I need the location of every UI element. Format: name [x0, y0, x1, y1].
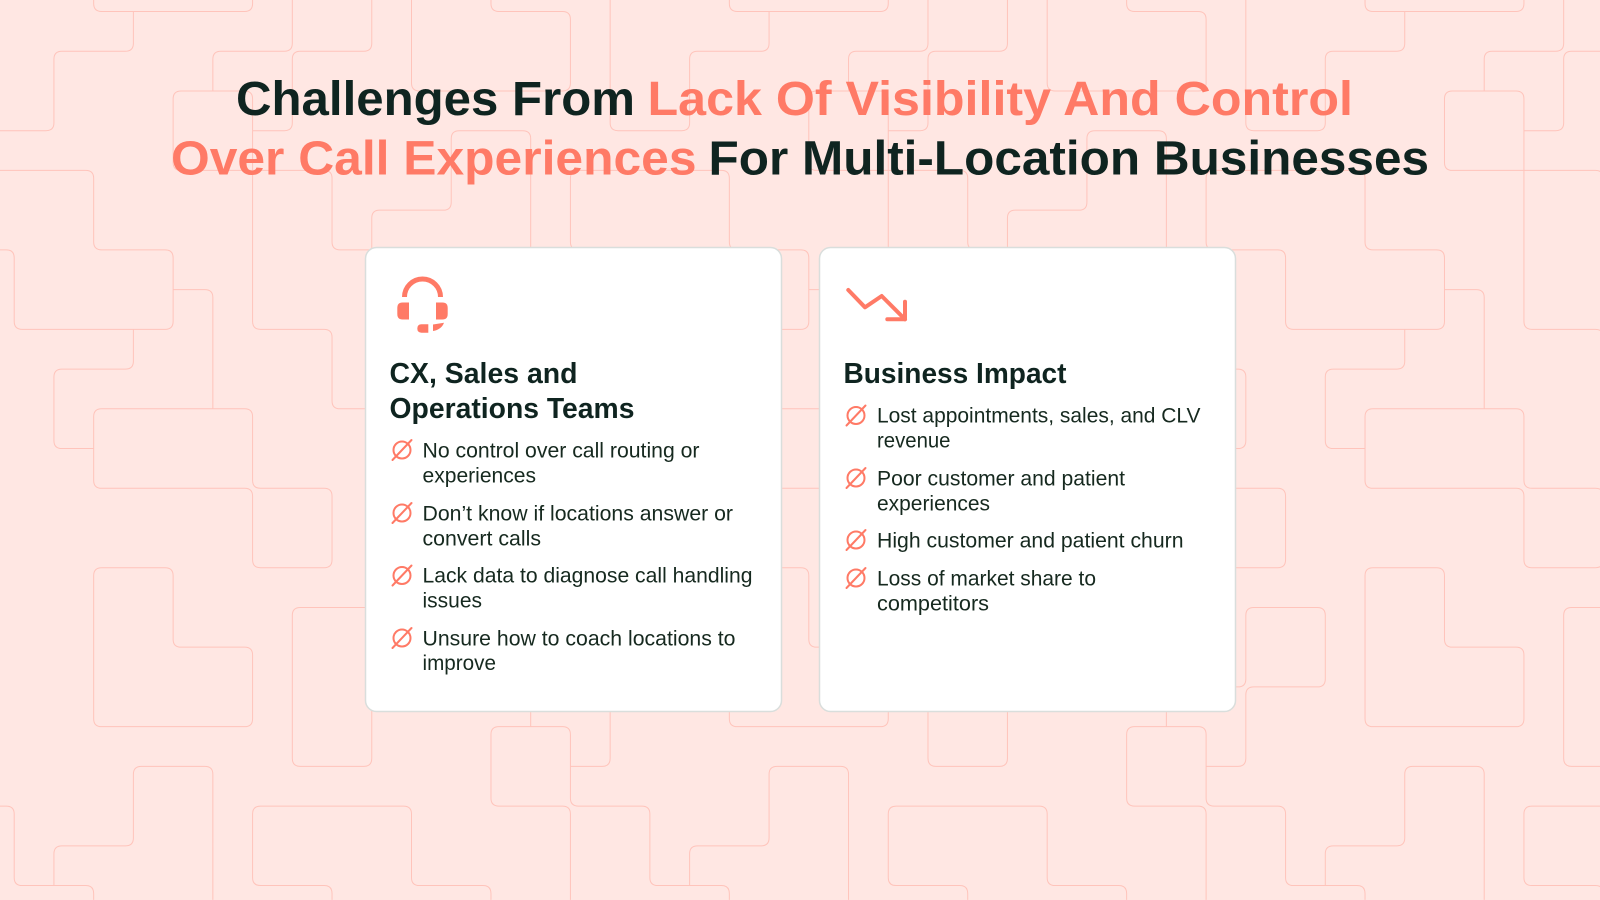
heading: Business Impact: Business Impact [844, 358, 1067, 390]
list item: no control [392, 440, 700, 488]
title: Lack Of Visibility And Control [648, 73, 1353, 126]
list item: lost appointments [846, 404, 1200, 452]
panel: Business Impact [820, 248, 1236, 712]
list item: lack data: Lack data to diagnose call handling [422, 564, 752, 588]
list item: churn: High customer and patient churn [877, 530, 1184, 552]
list item: locations answer [392, 502, 733, 550]
list item: unsure how to coach: improve [422, 652, 496, 675]
title: Over Call Experiences [171, 132, 696, 186]
list item: no control: experiences [422, 464, 536, 488]
heading: CX, Sales and Operations Teams: CX, Sales and [390, 358, 578, 390]
icon: headset [397, 279, 448, 333]
title: For Multi-Location Businesses [708, 132, 1429, 186]
title: Challenges From [236, 73, 635, 126]
list item: no control: No control over call routing or [422, 440, 700, 462]
list item: market share: competitors [877, 592, 989, 616]
list item: locations answer: convert calls [422, 528, 541, 550]
heading: CX, Sales and Operations Teams: Operations Teams [390, 393, 634, 425]
list item: lack data: issues [422, 590, 482, 612]
list item: poor experiences: experiences [877, 492, 990, 516]
list item: unsure how to coach [392, 628, 736, 675]
title [171, 73, 1429, 186]
list item: unsure how to coach: Unsure how to coach locations to [422, 628, 736, 650]
panel: CX, Sales and Operations Teams [366, 248, 782, 712]
list item: lost appointments: Lost appointments, sales, and CLV [877, 404, 1200, 428]
list item: market share [846, 568, 1096, 616]
icon: downward trend arrow [848, 290, 905, 319]
list item: poor experiences: Poor customer and patient [877, 468, 1125, 490]
list item: lack data [392, 564, 752, 612]
list item: lost appointments: revenue [877, 430, 950, 452]
list item: locations answer: Don’t know if locations answer or [422, 502, 733, 526]
heading: CX, Sales and Operations Teams [390, 358, 634, 425]
list item: market share: Loss of market share to [877, 568, 1096, 590]
list item: poor experiences [846, 468, 1125, 516]
